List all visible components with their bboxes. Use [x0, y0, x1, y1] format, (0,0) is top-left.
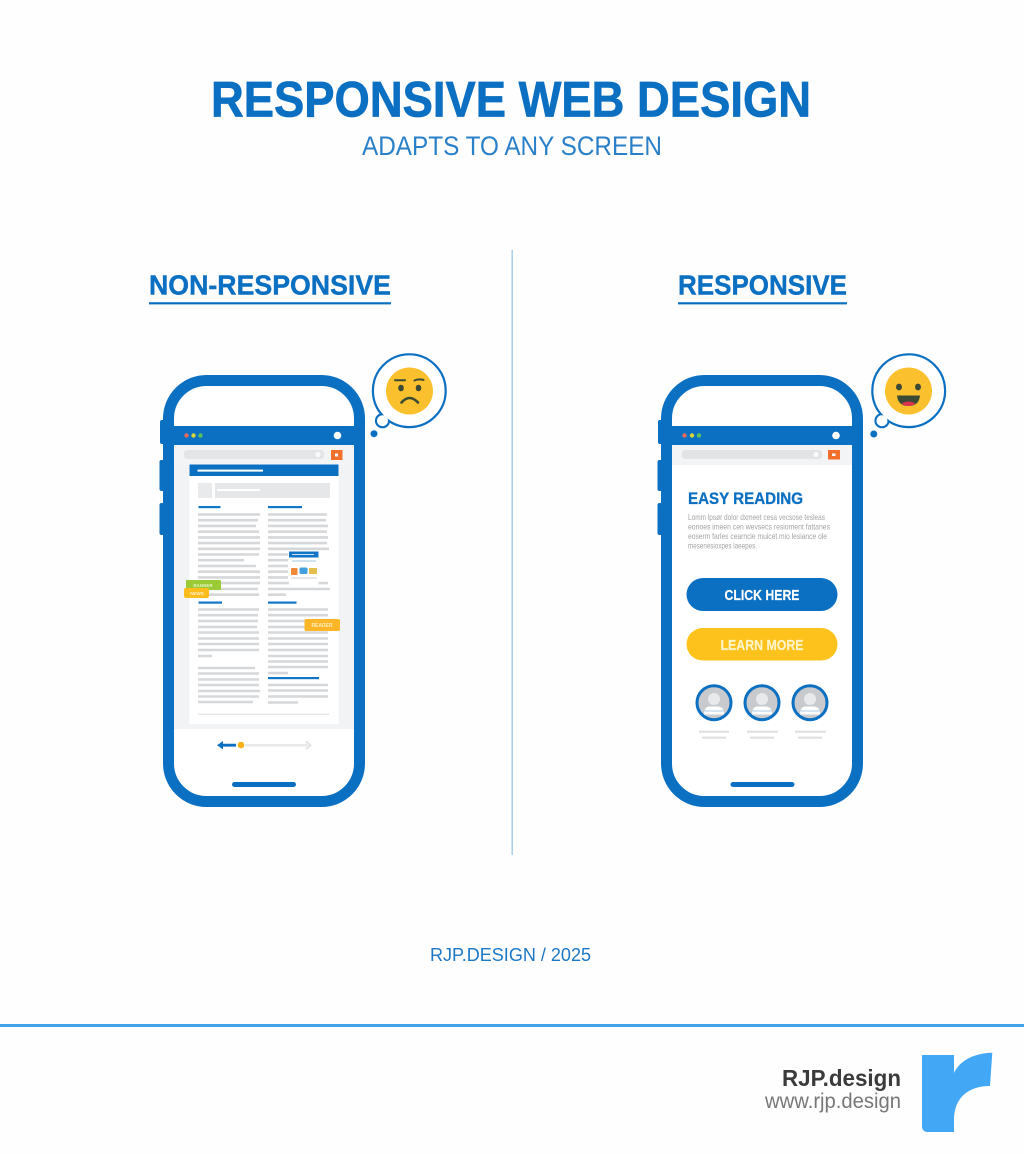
- avatar 1: [697, 686, 731, 720]
- address strip: [672, 445, 852, 465]
- body text: Lomm lpsør dolor dxmeet cesa vecsose tesleas: [688, 512, 825, 522]
- avatar captions: [699, 732, 826, 738]
- tag: yellow: NEWS: [190, 591, 204, 596]
- overlapping popup: [289, 552, 318, 586]
- tiny desktop page: [190, 464, 338, 724]
- heading: responsive: RESPONSIVE: [678, 270, 847, 300]
- browser bar: [671, 426, 853, 445]
- panel: responsive phone: [658, 380, 858, 802]
- body text: eoserm farles cearncie muicet mio lesiance ole: [688, 531, 827, 541]
- footer brand text: www.rjp.design: [764, 1090, 901, 1113]
- tag: yellow: [184, 588, 209, 598]
- icon: happy face bubble: [870, 354, 945, 438]
- avatar 2: [745, 686, 779, 720]
- avatar 3: [793, 686, 827, 720]
- browser bar: [173, 426, 355, 445]
- body text: eonoes imeen cen wevsecs resioment fattanes: [688, 522, 830, 532]
- button: click here: CLICK HERE: [724, 588, 800, 604]
- tag: green: [186, 580, 221, 590]
- heading: non-responsive: NON-RESPONSIVE: [149, 270, 391, 300]
- horizontal scrollbar: [217, 741, 310, 749]
- button: click here: [686, 578, 838, 611]
- title: RESPONSIVE WEB DESIGN: [211, 72, 811, 128]
- tag: green: BANNER: [193, 583, 213, 588]
- footer brand text: RJP.design: [782, 1065, 901, 1091]
- button: learn more: LEARN MORE: [720, 638, 804, 654]
- body text: [688, 512, 830, 550]
- subtitle: ADAPTS TO ANY SCREEN: [362, 131, 662, 161]
- icon: sad face bubble: [370, 354, 446, 437]
- footer brand text: [764, 1065, 901, 1113]
- panel: non-responsive phone: [160, 380, 360, 802]
- heading: easy reading: EASY READING: [688, 489, 803, 508]
- body text: mesenesioxpes laeepes.: [688, 540, 757, 550]
- icon: logo: [922, 1053, 992, 1132]
- tag: orange: [304, 619, 340, 631]
- address strip: [174, 445, 354, 465]
- button: learn more: [686, 628, 838, 660]
- credit line: RJP.DESIGN / 2025: [430, 945, 591, 965]
- tag: orange: READER: [311, 623, 333, 629]
